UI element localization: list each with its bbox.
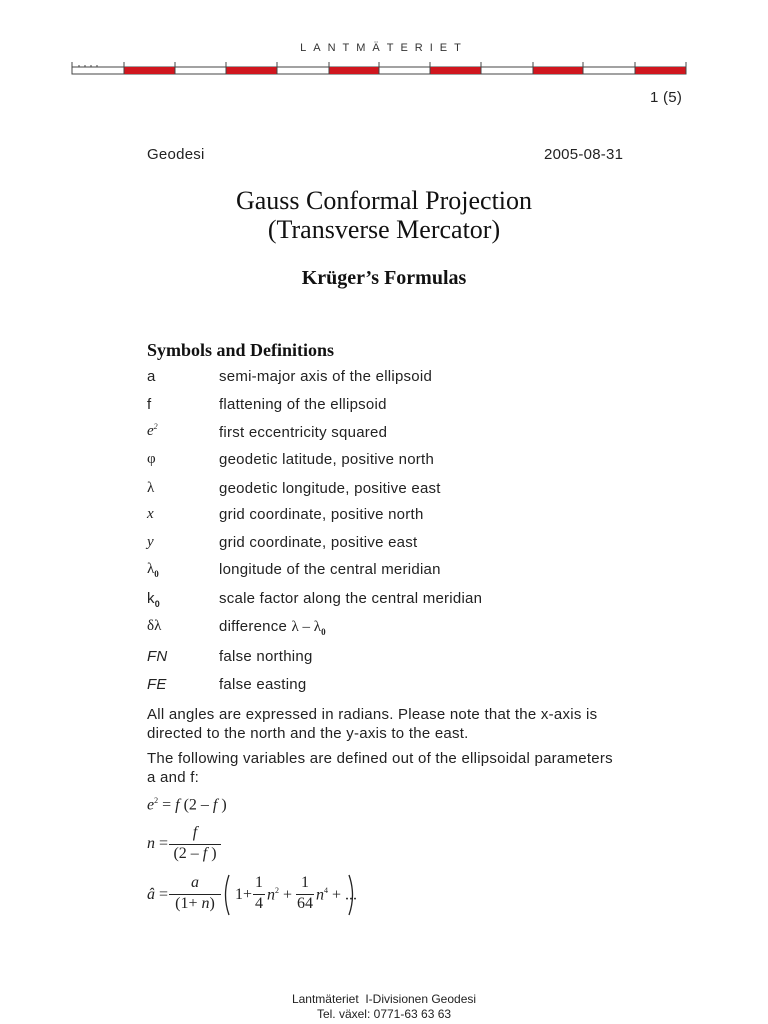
definitions list: false easting [219, 676, 306, 693]
header logo text: LANTMÄTERIET [300, 42, 468, 54]
note paragraph [147, 706, 597, 742]
definitions list: grid coordinate, positive east [219, 534, 417, 551]
variables paragraph: a and f: [147, 769, 199, 786]
subtitle: Krüger’s Formulas [302, 267, 466, 289]
formula a-hat: a [191, 874, 199, 891]
definitions list: a [147, 368, 156, 385]
definitions list: first eccentricity squared [219, 424, 387, 441]
formula n: (2 – f ) [173, 845, 217, 862]
title [236, 186, 532, 244]
title: (Transverse Mercator) [268, 215, 500, 244]
formula a-hat: 64 [297, 895, 313, 912]
formula a-hat: 1+ [235, 886, 252, 903]
definitions list: flattening of the ellipsoid [219, 396, 387, 413]
note paragraph: All angles are expressed in radians. Please note that the x-axis is [147, 706, 597, 723]
formula a-hat: 4 [255, 895, 263, 912]
definitions list: false northing [219, 648, 313, 665]
paren right [348, 874, 354, 916]
definitions list: FE [147, 676, 167, 693]
formula e2: e2 = f (2 – f ) [147, 796, 227, 813]
definitions list: FN [147, 648, 168, 665]
definitions list: scale factor along the central meridian [219, 590, 482, 607]
formula a-hat: 1 [255, 874, 263, 891]
formula a-hat: â = [147, 886, 168, 903]
definitions list: λ0 [147, 561, 159, 579]
scale bar [72, 62, 686, 74]
formula a-hat [147, 874, 357, 916]
definitions list: y [147, 534, 154, 550]
definitions list: difference λ – λ0 [219, 618, 326, 637]
page number: 1 (5) [650, 89, 682, 106]
footer [292, 992, 476, 1021]
formula a-hat: 1 [301, 874, 309, 891]
definitions list: f [147, 396, 151, 413]
department: Geodesi [147, 146, 205, 163]
definitions list: δλ [147, 618, 161, 634]
formula n: n = [147, 835, 168, 852]
formula n: f [193, 824, 197, 841]
definitions list: e2 [147, 422, 158, 439]
definitions list: λ [147, 480, 154, 496]
definitions list [146, 368, 482, 693]
paren left [224, 874, 230, 916]
footer: Lantmäteriet I-Divisionen Geodesi [292, 992, 476, 1006]
definitions list: k0 [147, 590, 160, 609]
definitions list: geodetic latitude, positive north [219, 451, 434, 468]
definitions list: grid coordinate, positive north [219, 506, 424, 523]
date: 2005-08-31 [544, 146, 623, 163]
definitions list: φ [147, 451, 156, 467]
section heading: Symbols and Definitions [147, 340, 334, 360]
definitions list: longitude of the central meridian [219, 561, 441, 578]
formula n [147, 824, 221, 862]
definitions list: x [147, 506, 154, 522]
formula a-hat: n4 + ... [316, 886, 357, 903]
formula a-hat: n2 + [267, 886, 292, 903]
definitions list: geodetic longitude, positive east [219, 480, 441, 497]
formula a-hat: (1+ n) [175, 895, 215, 912]
variables paragraph: The following variables are defined out of the ellipsoidal parameters [147, 750, 613, 767]
definitions list: semi-major axis of the ellipsoid [219, 368, 432, 385]
title: Gauss Conformal Projection [236, 186, 532, 215]
note paragraph: directed to the north and the y-axis to the east. [147, 725, 469, 742]
variables paragraph [147, 750, 613, 786]
footer: Tel. växel: 0771-63 63 63 [317, 1007, 451, 1021]
